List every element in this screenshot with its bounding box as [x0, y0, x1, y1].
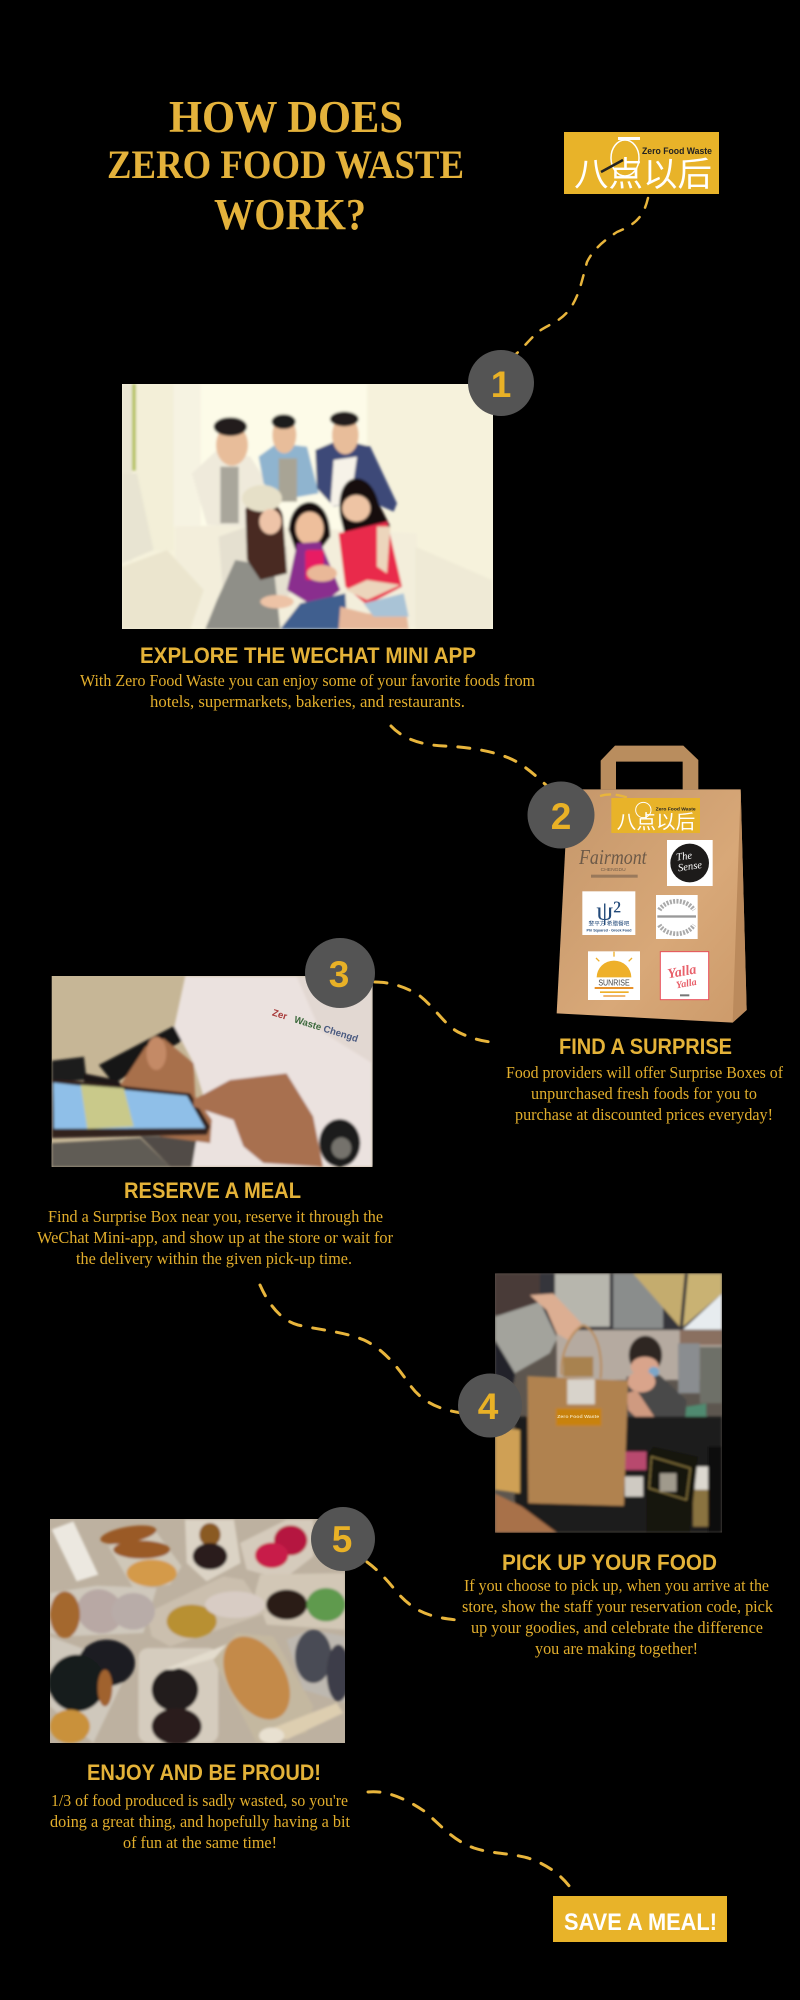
step number 2: [528, 782, 594, 848]
logo: Zero Food Waste: [564, 132, 719, 194]
step number 5: 5: [332, 1519, 352, 1560]
logo on bag: 八点以后: [617, 812, 695, 834]
logo: Yalla Yalla: Yalla: [675, 977, 698, 991]
text block: [50, 1791, 350, 1852]
heading: PICK UP YOUR FOOD: [502, 1550, 717, 1575]
text block: store, show the staff your reservation code, pick: [462, 1597, 774, 1616]
illustration: paper bag with partner logos: [557, 746, 747, 1023]
logo: Phi Squared: 斐平方 希腊餐吧: [589, 918, 630, 927]
step number 3: 3: [329, 954, 349, 995]
heading: RESERVE A MEAL: [124, 1178, 301, 1203]
arrow: step 2 to step 3: [375, 982, 491, 1042]
photo: friends looking at a phone on a sofa: [122, 384, 493, 629]
arrow: logo to step 1: [516, 198, 648, 354]
step number 1: [468, 350, 534, 416]
text block: [37, 1207, 393, 1268]
arrow: step 5 to call to action: [368, 1792, 570, 1887]
panel: step 5 enjoy and be proud: [48, 1519, 350, 1852]
arrow: step 3 to step 4: [260, 1285, 462, 1413]
text block: you are making together!: [535, 1639, 698, 1658]
title: ZERO FOOD WASTE: [107, 142, 464, 187]
panel: step 4 pick up your food: [462, 1274, 774, 1658]
step number 3: [305, 938, 375, 1008]
call to action button: SAVE A MEAL!: [564, 1909, 717, 1936]
logo: Phi Squared: Phi Squared · Greek Food: [587, 928, 631, 932]
logo: Sunrise: [588, 951, 640, 1000]
photo: rescued pastries in trays: [50, 1519, 345, 1743]
arrow: step 4 to step 5: [367, 1562, 457, 1620]
heading: ENJOY AND BE PROUD!: [87, 1760, 321, 1785]
arrow: step 1 to step 2: [391, 726, 546, 785]
logo: The Sense: The: [676, 850, 693, 864]
panel: step 1 explore the mini app: [80, 384, 535, 711]
photo: bag handover at a cafe counter: [495, 1273, 722, 1533]
logo: Fairmont: CHENGDU: [601, 867, 626, 872]
text block: Food providers will offer Surprise Boxes of: [506, 1063, 783, 1082]
text block: [80, 671, 535, 711]
text block: [462, 1576, 774, 1658]
step number 1: 1: [491, 364, 511, 405]
text block: purchase at discounted prices everyday!: [515, 1105, 773, 1124]
title: [107, 92, 464, 239]
panel: step 2 find a surprise: [506, 746, 783, 1124]
text block: [506, 1063, 783, 1124]
logo: Phi Squared: [582, 891, 635, 935]
text block: hotels, supermarkets, bakeries, and restaurants.: [150, 692, 465, 711]
text block: doing a great thing, and hopefully having a bit: [50, 1812, 350, 1831]
men: [192, 450, 265, 527]
logo: Yalla Yalla: Yalla: [666, 962, 698, 982]
women: [219, 527, 290, 607]
text block: of fun at the same time!: [123, 1833, 277, 1852]
step number 4: 4: [478, 1386, 499, 1427]
logo on bag: Zero Food Waste: [656, 807, 696, 813]
title: WORK?: [214, 190, 366, 239]
panel: step 3 reserve a meal: [37, 976, 393, 1268]
title: HOW DOES: [169, 92, 403, 142]
logo: Zero Food Waste: Zero Food Waste: [642, 146, 712, 157]
heading: EXPLORE THE WECHAT MINI APP: [140, 643, 476, 668]
text block: With Zero Food Waste you can enjoy some of your favorite foods from: [80, 671, 535, 690]
photo: hand using the mini app on a phone: [51, 976, 373, 1167]
text block: Find a Surprise Box near you, reserve it through the: [48, 1207, 383, 1226]
call to action button: [553, 1896, 727, 1942]
logo: Yalla Yalla: [660, 952, 709, 1000]
heading: FIND A SURPRISE: [559, 1034, 732, 1059]
photo: bag handover at a cafe counter: Zero Food Waste: [557, 1414, 600, 1419]
text block: If you choose to pick up, when you arrive at the: [464, 1576, 769, 1595]
logo: round emblem: [656, 895, 698, 939]
text block: 1/3 of food produced is sadly wasted, so you're: [51, 1791, 348, 1810]
text block: the delivery within the given pick-up time.: [76, 1249, 352, 1268]
logo: The Sense: Sense: [677, 860, 703, 874]
logo: Fairmont: [578, 845, 648, 878]
logo: Phi Squared: ψ²: [596, 895, 621, 925]
logo: Zero Food Waste: 八点以后: [574, 156, 712, 194]
step number 4: [458, 1374, 522, 1438]
step number 5: [311, 1507, 375, 1571]
text block: WeChat Mini-app, and show up at the store or wait for: [37, 1228, 393, 1247]
text block: unpurchased fresh foods for you to: [531, 1084, 757, 1103]
logo: The Sense: [667, 840, 713, 886]
step number 2: 2: [551, 796, 571, 837]
logo: Fairmont: Fairmont: [578, 845, 648, 869]
text block: up your goodies, and celebrate the difference: [471, 1618, 763, 1637]
logo on bag: [611, 798, 700, 834]
logo: Sunrise: SUNRISE: [598, 978, 630, 987]
photo: hand using the mini app on a phone: ZerWasteChengd: [271, 1008, 359, 1045]
